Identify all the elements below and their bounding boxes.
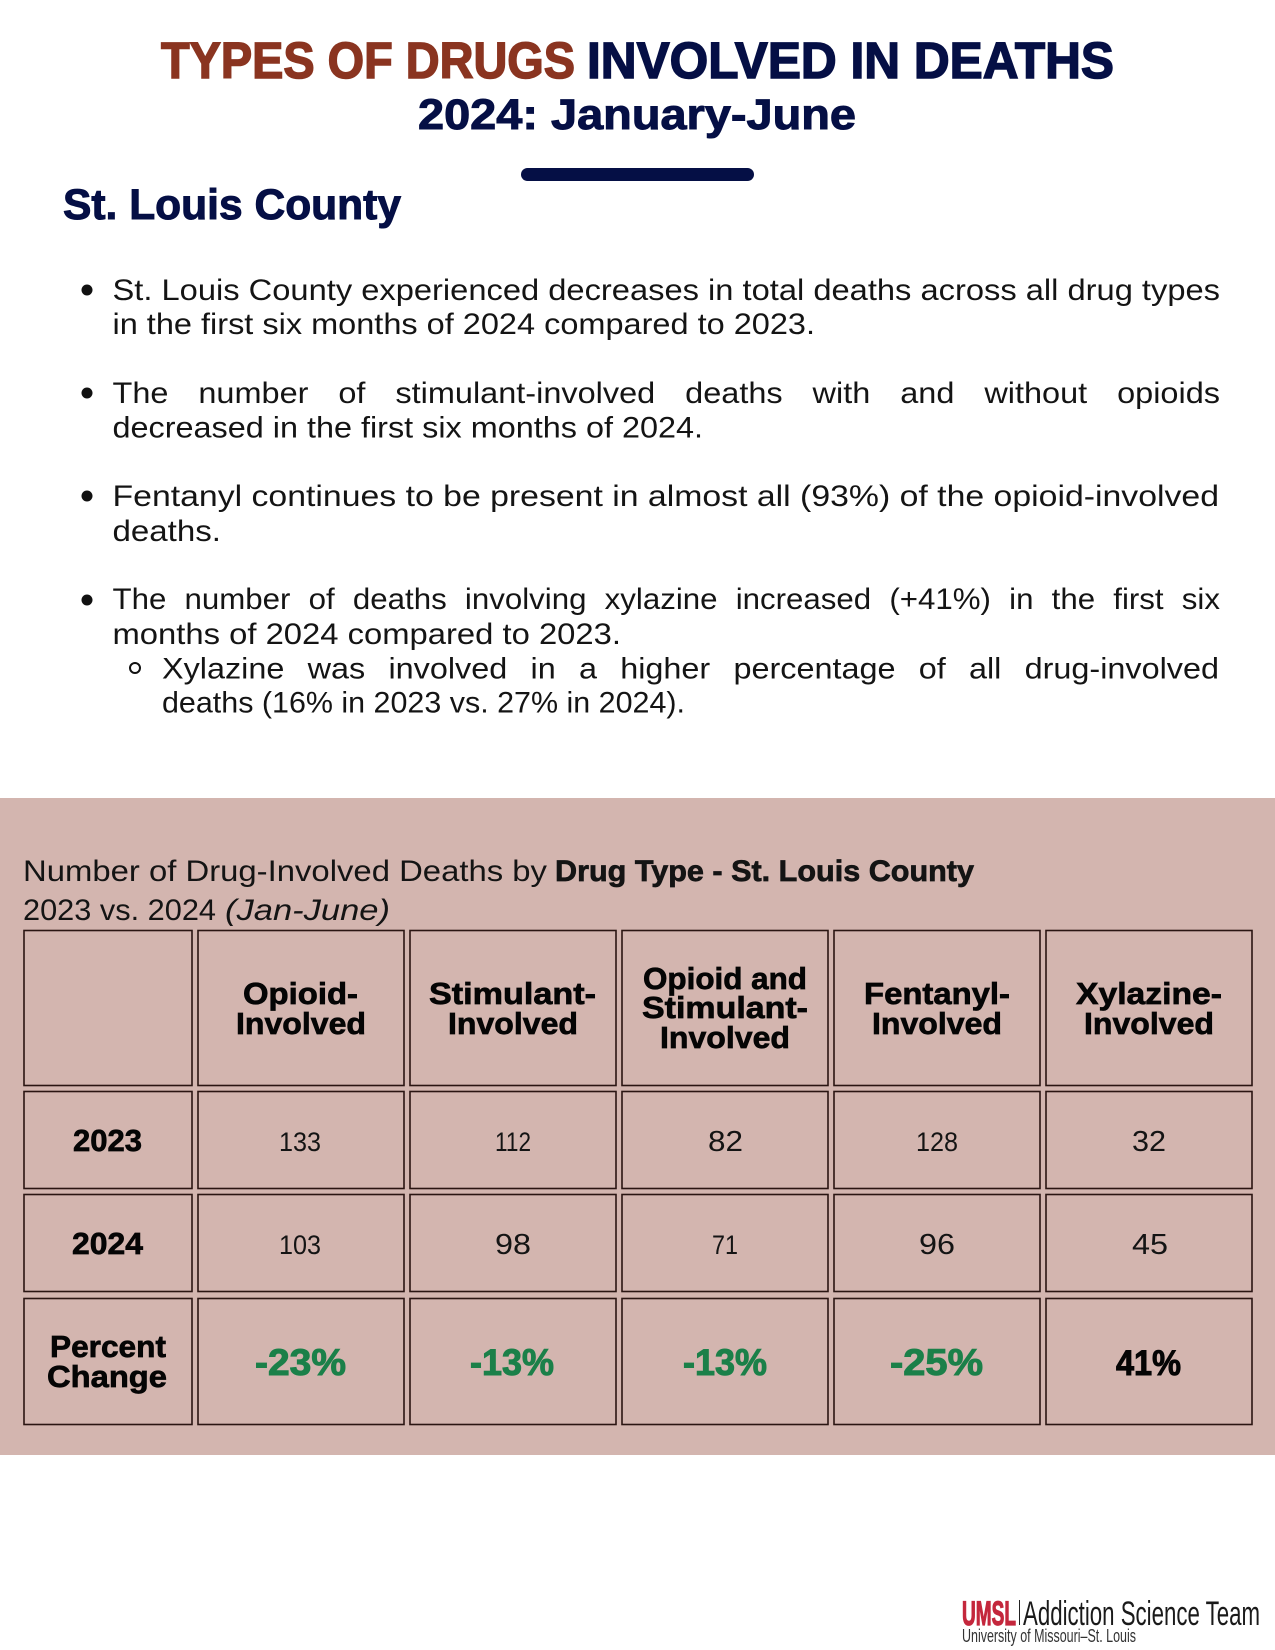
row: 2023: 82 <box>708 1126 743 1158</box>
sub-bullet: xylazine share <box>130 652 1219 720</box>
logo: UMSL Addiction Science Team <box>962 1595 1260 1646</box>
logo: UMSL Addiction Science Team: UMSL <box>962 1595 1016 1633</box>
row: 2023 <box>24 1092 1252 1188</box>
sub-bullet: xylazine share: deaths (16% in 2023 vs. 27% in 2024). <box>162 686 685 720</box>
logo: UMSL Addiction Science Team: University of Missouri–St. Louis <box>962 1626 1136 1646</box>
row: 2024: 98 <box>495 1229 531 1261</box>
row: 2024: 71 <box>712 1230 738 1260</box>
title divider bar <box>521 168 754 181</box>
title <box>161 32 1114 89</box>
table heading: 2023 vs. 2024 <box>23 894 216 927</box>
bullet 1: St. Louis County experienced decreases in total deaths across all drug types <box>112 274 1220 307</box>
row: 2023: 2023 <box>73 1123 142 1158</box>
row: 2024 <box>24 1194 1252 1292</box>
header: stimulant-involved <box>410 930 616 1086</box>
header: stimulant-involved: Stimulant- <box>429 976 596 1011</box>
header: stimulant-involved: Involved <box>448 1006 578 1041</box>
bullet 4: The number of deaths involving xylazine increased (+41%) in the first six <box>112 583 1220 616</box>
row: 2024: 96 <box>919 1229 955 1261</box>
header: opioid-involved: Involved <box>236 1006 366 1041</box>
row: percent change: -25% <box>890 1342 983 1383</box>
bullet 1: in the first six months of 2024 compared to 2023. <box>112 308 815 341</box>
bullet 4: months of 2024 compared to 2023. <box>112 618 621 651</box>
row: percent change: Percent <box>50 1329 166 1364</box>
row: 2023: 133 <box>279 1127 321 1157</box>
table heading: (Jan-June) <box>225 894 390 927</box>
header: xylazine-involved: Involved <box>1084 1006 1214 1041</box>
row: 2024: 103 <box>279 1230 321 1260</box>
row: percent change: -13% <box>470 1342 554 1383</box>
table heading: Drug Type - St. Louis County <box>555 855 974 888</box>
header: xylazine-involved: Xylazine- <box>1076 976 1222 1011</box>
row: percent change: -13% <box>683 1342 767 1383</box>
row: 2024: 2024 <box>72 1226 144 1261</box>
row: percent change: Change <box>47 1359 167 1394</box>
bullet 3: Fentanyl continues to be present in almost all (93%) of the opioid-involved <box>112 480 1219 513</box>
table heading: Number of Drug-Involved Deaths by <box>23 855 547 888</box>
header: opioid-involved: Opioid- <box>243 976 358 1011</box>
empty corner cell <box>24 930 192 1086</box>
header: opioid and stimulant-involved <box>622 930 828 1086</box>
key findings bullet list <box>82 274 1220 720</box>
row: 2023: 112 <box>495 1127 531 1157</box>
title: TYPES OF DRUGS <box>161 32 575 89</box>
sub-bullet: xylazine share: Xylazine was involved in a higher percentage of all drug-involved <box>162 652 1219 686</box>
bullet 1 <box>82 274 1220 341</box>
row: 2024: 45 <box>1132 1229 1168 1261</box>
bullet 3 <box>82 480 1219 548</box>
row: percent change <box>24 1298 1252 1424</box>
table heading <box>23 855 974 927</box>
header: fentanyl-involved <box>834 930 1040 1086</box>
bullet 2: The number of stimulant-involved deaths with and without opioids <box>112 377 1220 410</box>
bullet 2: decreased in the first six months of 2024. <box>112 412 703 444</box>
header: opioid and stimulant-involved: Stimulant- <box>642 990 808 1025</box>
header: fentanyl-involved: Fentanyl- <box>864 976 1010 1011</box>
header: fentanyl-involved: Involved <box>872 1006 1002 1041</box>
bullet 4 <box>82 583 1220 651</box>
header: xylazine-involved <box>1046 930 1252 1086</box>
row: 2023: 128 <box>916 1127 958 1157</box>
row: percent change: -23% <box>255 1342 346 1383</box>
title: INVOLVED IN DEATHS <box>587 32 1114 89</box>
header: opioid-involved <box>198 930 404 1086</box>
header: opioid and stimulant-involved: Opioid and <box>643 961 807 996</box>
subtitle: 2024: January-June <box>418 91 856 139</box>
header: opioid and stimulant-involved: Involved <box>660 1020 790 1055</box>
county heading: St. Louis County <box>63 181 401 229</box>
bullet 3: deaths. <box>112 515 221 548</box>
row: 2023: 32 <box>1132 1126 1166 1158</box>
row: percent change: 41% <box>1116 1344 1181 1383</box>
bullet 2 <box>82 377 1220 444</box>
panel: deaths by drug type <box>0 798 1275 1455</box>
data table <box>24 930 1252 1424</box>
